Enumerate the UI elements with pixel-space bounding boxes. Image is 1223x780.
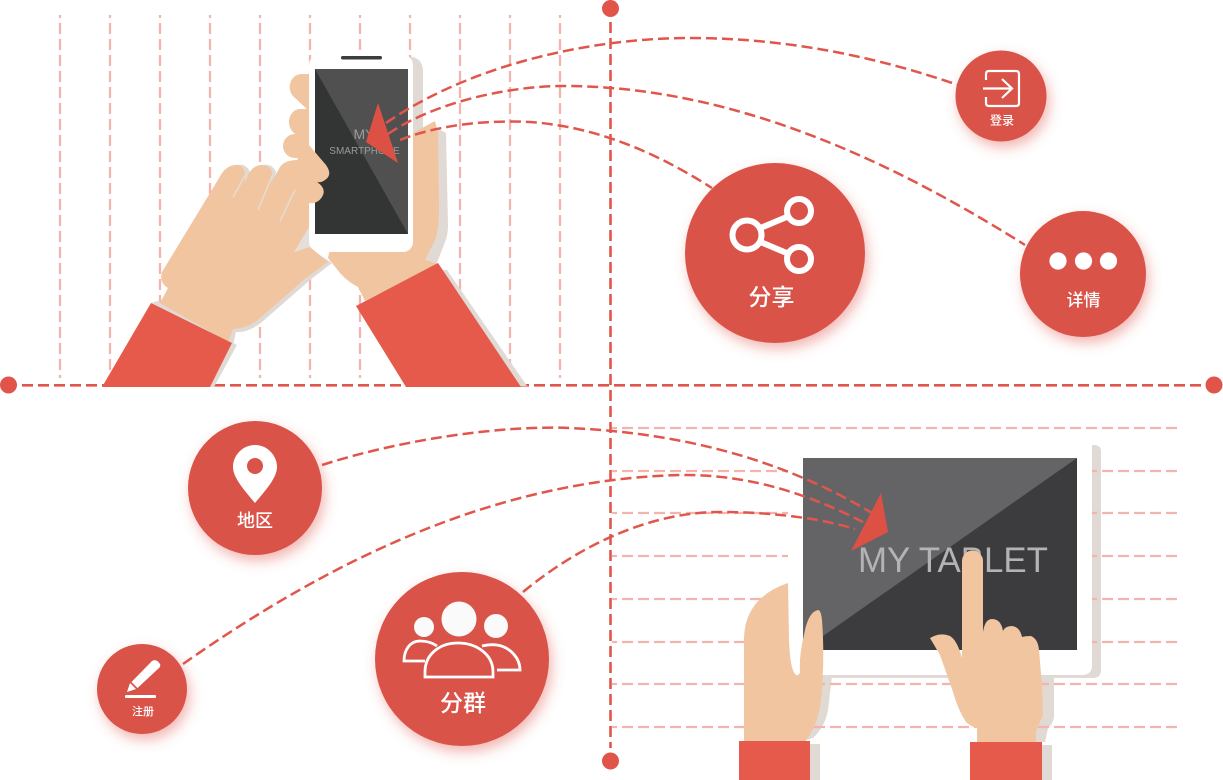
left hand finger creases xyxy=(233,174,295,221)
icon: pencil xyxy=(125,660,160,698)
icon: share xyxy=(732,199,811,271)
badge: region xyxy=(188,421,322,555)
right hand shadow xyxy=(420,128,448,268)
tablet shadows xyxy=(805,445,1101,742)
phone label: MY xyxy=(354,126,375,142)
icon: people xyxy=(404,602,520,677)
badge: register xyxy=(97,644,187,734)
badge: share xyxy=(685,163,865,343)
vertical grid lines xyxy=(60,15,560,378)
right hand xyxy=(328,121,439,301)
illustration: hands on tablet xyxy=(739,445,1092,780)
phone screen xyxy=(315,69,408,234)
tablet right sleeve xyxy=(970,742,1042,780)
phone label: SMARTPHONE xyxy=(329,146,400,157)
tablet screen xyxy=(803,458,1077,650)
illustration: hands holding smartphone xyxy=(102,55,527,387)
arrow: tablet xyxy=(851,493,888,551)
phone screen highlight xyxy=(315,69,408,234)
badge: login xyxy=(956,50,1046,142)
phone label xyxy=(329,126,400,157)
tablet label: MY TABLET xyxy=(858,541,1048,580)
label: share: 分享 xyxy=(748,284,794,310)
tablet body xyxy=(788,445,1092,675)
left sleeve xyxy=(102,303,232,387)
arrow: smartphone xyxy=(366,103,398,163)
left hand shadow xyxy=(226,250,332,345)
phone body xyxy=(309,55,413,252)
right sleeve xyxy=(356,263,521,387)
label: register: 注册 xyxy=(132,704,154,718)
fingertip shadows xyxy=(236,165,276,188)
phone shadow xyxy=(405,57,423,240)
label: group: 分群 xyxy=(440,690,486,716)
connector curves: smartphone to icons xyxy=(386,38,1025,245)
left hand xyxy=(160,145,329,342)
upper fingers xyxy=(283,74,312,160)
label: login: 登录 xyxy=(990,112,1014,128)
icon: login xyxy=(983,71,1019,106)
right sleeve shadow xyxy=(1022,745,1052,780)
tablet right hand xyxy=(930,550,1043,743)
tablet screen highlight xyxy=(803,458,1077,650)
palm wedge shadow xyxy=(293,227,311,252)
connector curves: tablet to icons xyxy=(183,428,872,664)
label: details: 详情 xyxy=(1066,291,1100,310)
badge: details xyxy=(1020,211,1146,337)
icon: three dots xyxy=(1049,252,1117,270)
badge: group xyxy=(375,572,549,746)
right sleeve shadow xyxy=(438,270,527,386)
phone speaker xyxy=(341,56,382,60)
tablet left sleeve xyxy=(739,741,810,780)
left sleeve shadow xyxy=(790,744,820,780)
icon: map pin xyxy=(233,445,277,503)
left sleeve shadow xyxy=(151,301,237,387)
label: region: 地区 xyxy=(237,511,273,531)
horizontal grid lines xyxy=(612,428,1177,727)
tablet left hand xyxy=(744,583,823,742)
